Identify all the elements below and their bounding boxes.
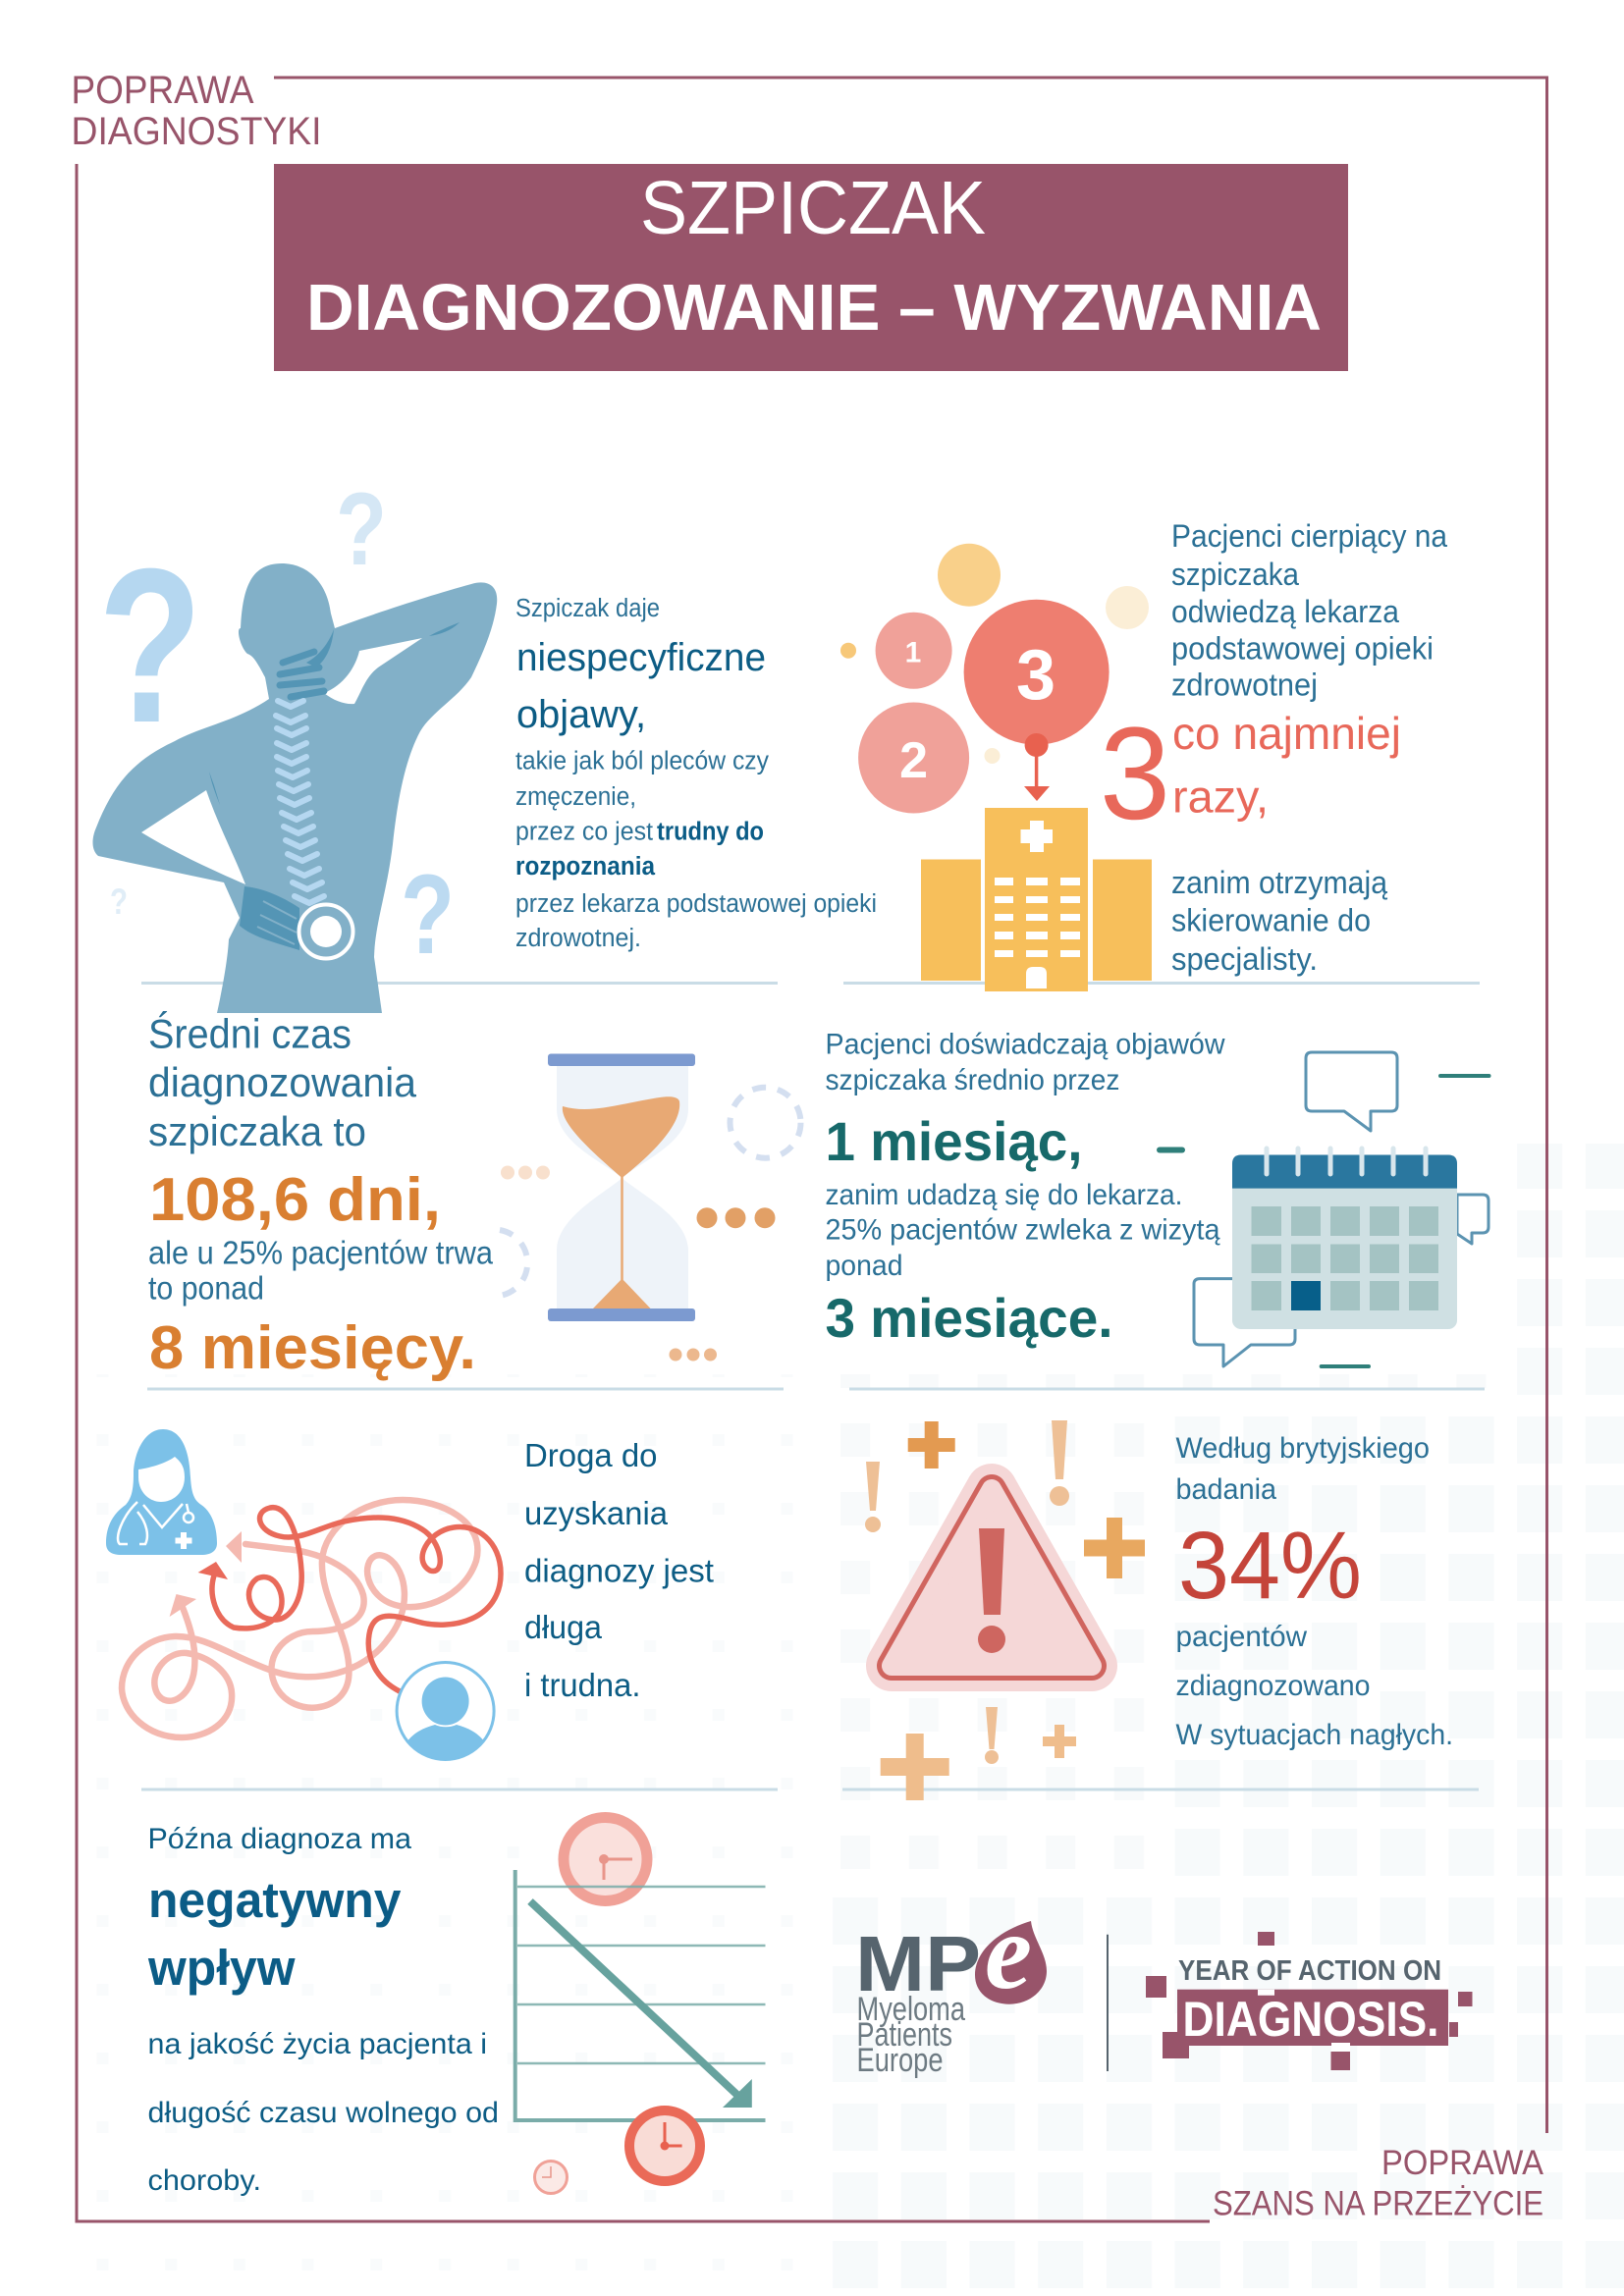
text: emergency diagnosis: W sytuacjach nagłych. bbox=[1176, 1719, 1453, 1751]
icon: bottom clock bbox=[629, 2110, 700, 2181]
label: poprawa diagnostyki: DIAGNOSTYKI bbox=[71, 110, 322, 153]
logo: Myeloma Patients Europe: Europe bbox=[856, 2042, 943, 2079]
text: nonspecific symptoms: zdrowotnej. bbox=[515, 925, 641, 952]
logo: Year of Action on Diagnosis: YEAR OF ACTION ON bbox=[1178, 1955, 1441, 1987]
icon: dashes bbox=[1322, 1076, 1489, 1366]
panel: nonspecific symptoms bbox=[92, 472, 877, 1013]
text: nonspecific symptoms: takie jak ból pleców czy bbox=[515, 748, 769, 775]
logo: Myeloma Patients Europe: Myeloma bbox=[856, 1991, 965, 2028]
text: negative impact: wpływ bbox=[147, 1940, 296, 1996]
text: GP visits: zanim otrzymają bbox=[1171, 865, 1387, 900]
text: diagnosis time: Średni czas bbox=[148, 1009, 352, 1056]
text: emergency diagnosis: badania bbox=[1176, 1473, 1276, 1506]
icon: hourglass bbox=[548, 1054, 695, 1321]
icon: question marks: ? bbox=[110, 881, 128, 922]
text: GP visits: Pacjenci cierpiący na bbox=[1171, 518, 1447, 554]
text: GP visits bbox=[1171, 518, 1447, 977]
icon: drop with letter e: e bbox=[985, 1892, 1032, 2011]
text: negative impact: choroby. bbox=[147, 2164, 261, 2197]
icon: hospital bbox=[921, 808, 1152, 991]
big number 3: 3 bbox=[1100, 701, 1170, 847]
icon: man with back pain bbox=[92, 563, 497, 1013]
text: nonspecific symptoms: przez co jest bbox=[515, 819, 653, 846]
text: GP visits: co najmniej bbox=[1172, 708, 1401, 759]
path: pink winding route bbox=[122, 1500, 477, 1737]
text: GP visits: szpiczaka bbox=[1171, 557, 1299, 592]
text: diagnosis time bbox=[148, 1009, 494, 1382]
text: symptom duration: 1 miesiąc, bbox=[825, 1110, 1082, 1172]
icon: question marks bbox=[98, 472, 455, 978]
icon: numbered bubbles: 1 bbox=[905, 636, 921, 669]
decorative dots and dashed circles bbox=[500, 1088, 801, 1361]
logo: Year of Action on Diagnosis bbox=[1146, 1932, 1473, 2070]
icon: plus signs bbox=[881, 1421, 1145, 1800]
text: symptom duration bbox=[825, 1029, 1225, 1349]
text: emergency diagnosis bbox=[1176, 1432, 1453, 1751]
text: symptom duration: zanim udadzą się do lekarza. bbox=[825, 1179, 1182, 1211]
icon: question marks: ? bbox=[401, 852, 455, 978]
label: poprawa szans na przeżycie: POPRAWA bbox=[1381, 2144, 1544, 2182]
icon: short dash bbox=[1160, 1147, 1182, 1152]
icon: small clock bbox=[534, 2162, 568, 2193]
text: long road: diagnozy jest bbox=[524, 1553, 714, 1589]
panel: emergency diagnosis bbox=[865, 1420, 1453, 1800]
logo: Myeloma Patients Europe bbox=[855, 1892, 1047, 2079]
chart: declining quality of life bbox=[515, 1870, 766, 2120]
text: symptom duration: szpiczaka średnio przez bbox=[825, 1064, 1119, 1096]
text: GP visits: skierowanie do bbox=[1171, 903, 1371, 938]
text: emergency diagnosis: Według brytyjskiego bbox=[1176, 1432, 1430, 1465]
panel: average diagnosis time bbox=[148, 1009, 801, 1382]
icon: top clock bbox=[564, 1818, 647, 1900]
text: GP visits: razy, bbox=[1172, 772, 1269, 823]
icon: calendar bbox=[1232, 1148, 1457, 1329]
label: poprawa szans na przeżycie bbox=[1213, 2144, 1544, 2223]
icon: question marks: ? bbox=[98, 523, 202, 769]
text: emergency diagnosis: pacjentów bbox=[1176, 1621, 1307, 1653]
label: poprawa szans na przeżycie: SZANS NA PRZEŻYCIE bbox=[1213, 2185, 1543, 2223]
label: poprawa diagnostyki: POPRAWA bbox=[71, 69, 254, 112]
logo: Myeloma Patients Europe: Patients bbox=[856, 2016, 952, 2054]
icon: patient bbox=[397, 1663, 494, 1762]
text: negative impact: długość czasu wolnego od bbox=[147, 2097, 499, 2129]
icon: warning triangle bbox=[892, 1489, 1092, 1666]
title banner bbox=[274, 164, 1348, 371]
panel: long road to diagnosis bbox=[106, 1429, 714, 1762]
text: long road bbox=[524, 1437, 714, 1703]
icon: drop with letter e bbox=[975, 1892, 1047, 2011]
text: symptom duration: 25% pacjentów zwleka z wizytą bbox=[825, 1213, 1220, 1247]
icon: exclamation marks bbox=[865, 1420, 1069, 1764]
text: nonspecific symptoms: objawy, bbox=[516, 693, 646, 736]
icon: speech bubbles bbox=[1194, 1052, 1489, 1366]
text: nonspecific symptoms: zmęczenie, bbox=[515, 783, 636, 811]
text: negative impact bbox=[147, 1823, 499, 2197]
icon: numbered bubbles: 3 bbox=[1016, 636, 1056, 715]
text: negative impact: Późna diagnoza ma bbox=[147, 1823, 411, 1855]
panel: symptom duration bbox=[825, 1029, 1489, 1366]
section dividers bbox=[141, 984, 1485, 1789]
text: symptom duration: Pacjenci doświadczają objawów bbox=[825, 1029, 1225, 1060]
text: symptom duration: 3 miesiące. bbox=[825, 1287, 1113, 1349]
text: diagnosis time: diagnozowania bbox=[148, 1059, 417, 1105]
icon: numbered bubbles: 2 bbox=[899, 732, 928, 789]
icon: question marks: ? bbox=[336, 472, 387, 587]
text: GP visits: specjalisty. bbox=[1171, 941, 1318, 977]
text: negative impact: negatywny bbox=[148, 1872, 402, 1928]
title banner: SZPICZAK bbox=[640, 166, 986, 250]
text: long road: uzyskania bbox=[524, 1495, 669, 1531]
text: nonspecific symptoms bbox=[515, 595, 877, 952]
text: GP visits: odwiedzą lekarza bbox=[1171, 594, 1399, 629]
text: emergency diagnosis: zdiagnozowano bbox=[1176, 1670, 1371, 1702]
text: negative impact: na jakość życia pacjenta i bbox=[147, 2028, 487, 2060]
text: diagnosis time: 108,6 dni, bbox=[149, 1166, 441, 1234]
text: nonspecific symptoms: Szpiczak daje bbox=[515, 595, 660, 622]
text: GP visits: podstawowej opieki bbox=[1171, 630, 1434, 666]
text: diagnosis time: szpiczaka to bbox=[148, 1108, 366, 1154]
icon: doctor bbox=[106, 1429, 217, 1555]
text: long road: i trudna. bbox=[524, 1667, 640, 1703]
text: emergency diagnosis: 34% bbox=[1178, 1512, 1362, 1619]
logo: Myeloma Patients Europe: MP bbox=[855, 1920, 981, 2007]
text: diagnosis time: 8 miesięcy. bbox=[149, 1314, 476, 1382]
label: poprawa diagnostyki bbox=[71, 69, 322, 153]
text: long road: Droga do bbox=[524, 1437, 658, 1473]
panel: three GP visits bbox=[840, 518, 1447, 991]
panel: negative impact bbox=[147, 1818, 766, 2197]
text: GP visits: zdrowotnej bbox=[1171, 667, 1318, 703]
title banner: DIAGNOZOWANIE – WYZWANIA bbox=[306, 271, 1322, 345]
text: diagnosis time: to ponad bbox=[148, 1270, 264, 1307]
text: diagnosis time: ale u 25% pacjentów trwa bbox=[148, 1235, 494, 1270]
text: nonspecific symptoms: rozpoznania bbox=[515, 853, 656, 881]
logo: Year of Action on Diagnosis: DIAGNOSIS. bbox=[1182, 1992, 1439, 2047]
text: symptom duration: ponad bbox=[825, 1250, 903, 1282]
path: red winding route bbox=[198, 1508, 501, 1691]
text: long road: długa bbox=[524, 1609, 603, 1645]
text: nonspecific symptoms: trudny do bbox=[657, 819, 764, 846]
text: nonspecific symptoms: niespecyficzne bbox=[516, 636, 766, 679]
icon: numbered bubbles bbox=[840, 544, 1149, 813]
text: nonspecific symptoms: przez lekarza podstawowej opieki bbox=[515, 890, 877, 918]
